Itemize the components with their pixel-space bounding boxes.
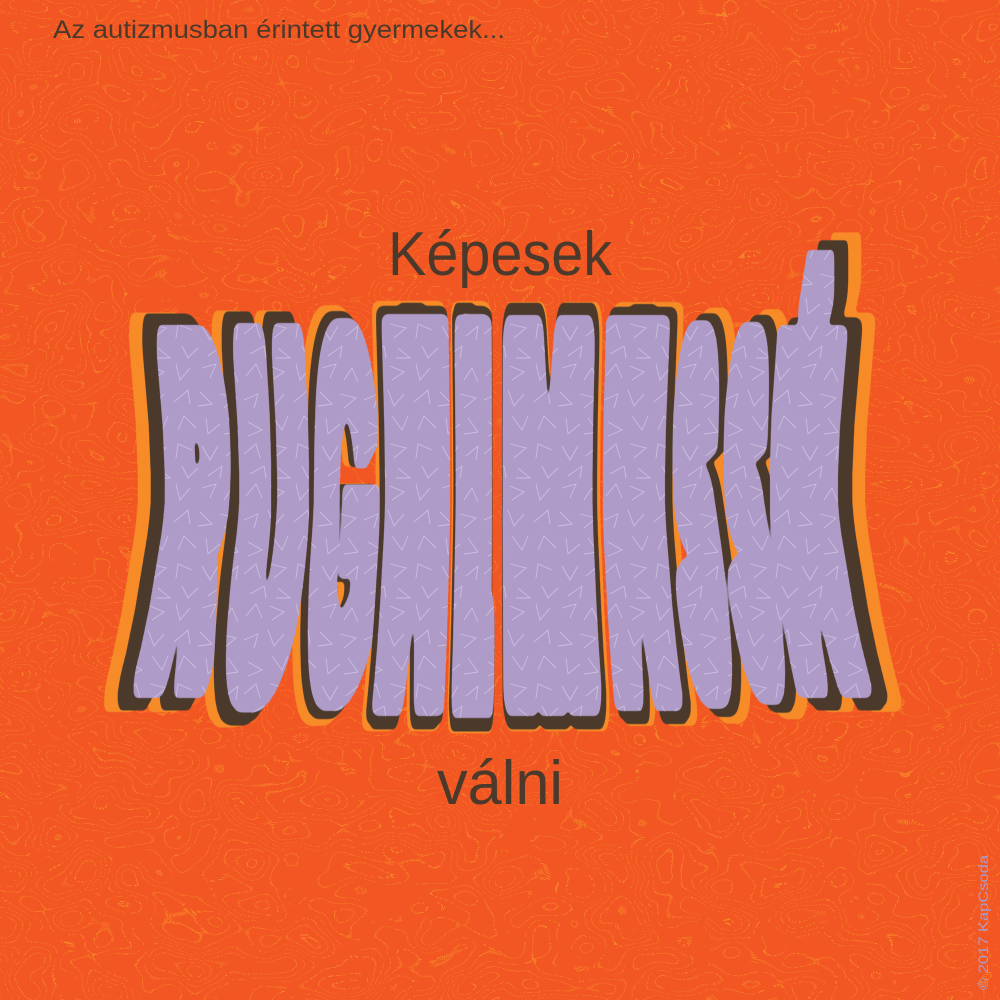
copyright note, vertical: © 2017 KapCsoda bbox=[975, 855, 991, 990]
dark brown shadow layer bbox=[109, 226, 889, 803]
top caption: Az autizmusban érintett gyermekek... bbox=[53, 16, 505, 44]
big stretched word: RUGALMASSÁ bbox=[104, 232, 902, 734]
heading: Képesek: Képesek bbox=[388, 220, 613, 289]
lilac letter layer bbox=[124, 237, 874, 791]
chevron pattern on the letters bbox=[134, 250, 872, 718]
orange outer shadow layer bbox=[94, 217, 904, 811]
closing word: válni: válni bbox=[437, 749, 563, 818]
